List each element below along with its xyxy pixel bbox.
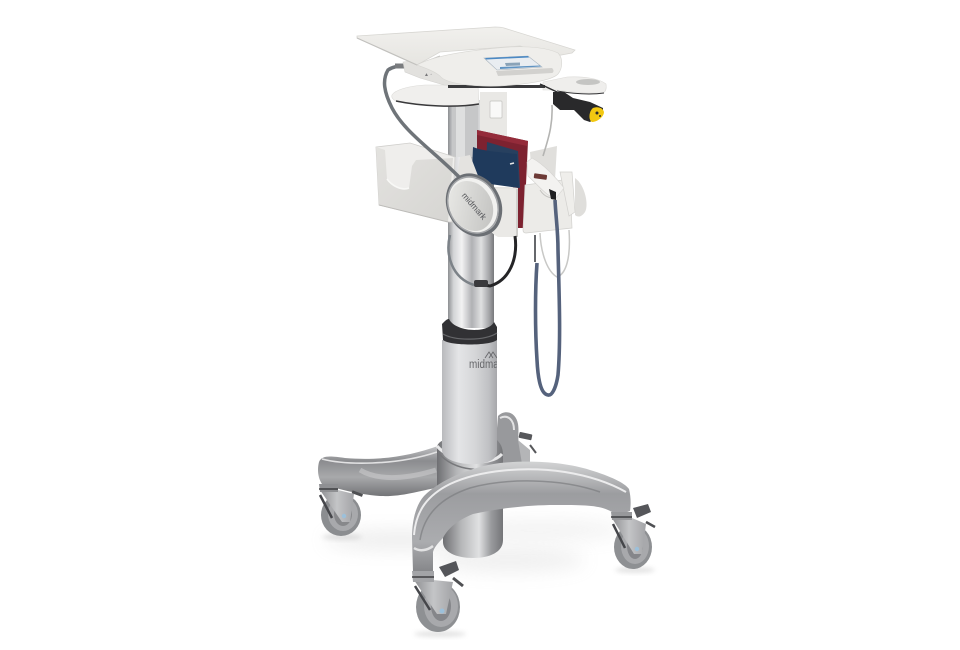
gray tubing loop [448, 235, 474, 285]
tray [357, 27, 575, 65]
lower column with logo [442, 340, 497, 464]
dark short cord [534, 235, 536, 262]
black tubing loop [474, 236, 516, 287]
right device holder [523, 172, 587, 233]
rear base arm with caster [496, 412, 536, 470]
bracket label [490, 101, 502, 118]
left caster [319, 484, 363, 536]
navy blood pressure cuff [472, 142, 520, 188]
handheld scanner with yellow cap [553, 92, 604, 122]
stethoscope hose [385, 66, 460, 178]
control unit underside [403, 60, 557, 92]
base hub collar [437, 440, 503, 488]
left shelf [392, 85, 479, 106]
finger grip bar [496, 68, 554, 76]
left storage bin [376, 143, 455, 222]
maroon blood pressure cuff [477, 130, 528, 228]
upper chrome column [448, 100, 494, 328]
right shelf [543, 77, 606, 94]
front caster [412, 561, 463, 632]
disc logo text: midmark [460, 190, 489, 222]
touch screen [484, 56, 542, 70]
thermometer [527, 158, 564, 198]
white column bracket [480, 92, 507, 150]
control unit underside: ▲ ◦ [424, 72, 432, 78]
right caster [611, 504, 655, 569]
product illustration: mobile vitals cart [318, 26, 656, 638]
thin white cord to handle [543, 105, 552, 156]
thin white cord loop [540, 230, 569, 277]
right rear white holder [530, 146, 557, 180]
front base arm [412, 462, 631, 576]
center holder pocket [455, 155, 518, 237]
control unit with touch screen [417, 47, 562, 86]
left base arm [318, 446, 440, 496]
lower pedestal below the base [443, 500, 503, 558]
coiled blue-gray cords [536, 200, 560, 395]
gray sleeve behind the shelf [452, 105, 478, 157]
black collar [442, 319, 497, 344]
stethoscope disc holder [437, 166, 511, 244]
column logo mark [485, 352, 497, 358]
floor shadows [322, 520, 655, 637]
column logo text: midmark [469, 359, 507, 371]
black cord plug [549, 189, 556, 200]
